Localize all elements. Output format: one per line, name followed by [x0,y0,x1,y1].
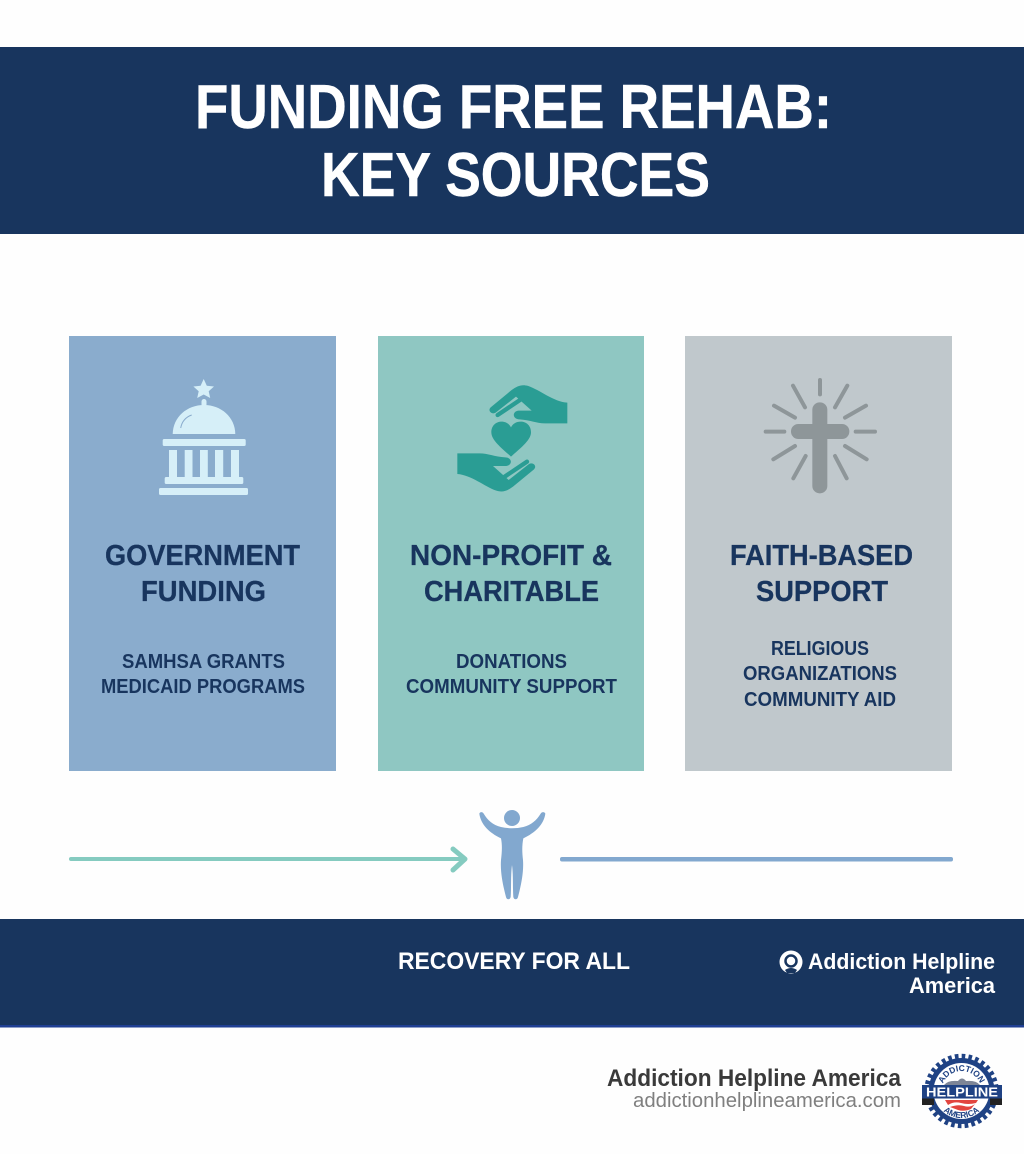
banner brand name [808,949,996,998]
card details: ORGANIZATIONS [743,663,897,685]
icon: person with raised arms [479,810,545,899]
card heading: NON-PROFIT & [410,540,612,572]
card heading: FAITH-BASED [730,540,913,572]
icon: helpline america seal: AMERICA [944,1108,980,1118]
icon: cross with rays [766,380,875,493]
title: KEY SOURCES [321,141,710,210]
card details: DONATIONS [456,651,567,673]
brand name and website [607,1065,902,1112]
banner brand name: America [909,973,996,998]
title [195,73,832,210]
footer banner [0,919,1024,1028]
card details [406,651,617,698]
card details: RELIGIOUS [771,638,869,660]
card heading: SUPPORT [756,576,888,608]
brand name and website: Addiction Helpline America [607,1065,902,1092]
card details: MEDICAID PROGRAMS [101,676,305,698]
card heading [105,540,300,608]
card heading: CHARITABLE [424,576,599,608]
card details [101,651,305,698]
card details: COMMUNITY SUPPORT [406,676,617,698]
card details: SAMHSA GRANTS [122,651,285,673]
card heading: GOVERNMENT [105,540,300,572]
icon: helpline america seal: ADDICTION [939,1065,985,1084]
icon: capitol building [159,379,248,495]
card heading [410,540,612,608]
card details: COMMUNITY AID [744,689,896,711]
banner brand name: Addiction Helpline [808,949,995,974]
panel: non-profit and charitable [378,336,644,771]
line: blue path from person [560,857,953,862]
panel: government funding [69,336,336,771]
brand name and website: addictionhelplineamerica.com [633,1090,901,1112]
card heading [730,540,913,608]
title: FUNDING FREE REHAB: [195,73,832,142]
icon: helpline america seal: HELPLINE [926,1084,998,1100]
icon: helpline logo mark [780,950,802,974]
arrow: teal path to person [71,849,465,870]
icon: helpline america seal [922,1054,1002,1128]
icon: hands holding heart [457,385,567,491]
card details [743,638,897,711]
header banner [0,47,1024,234]
panel: faith-based support [685,336,952,771]
banner caption: RECOVERY FOR ALL [398,948,630,975]
card heading: FUNDING [141,576,266,608]
